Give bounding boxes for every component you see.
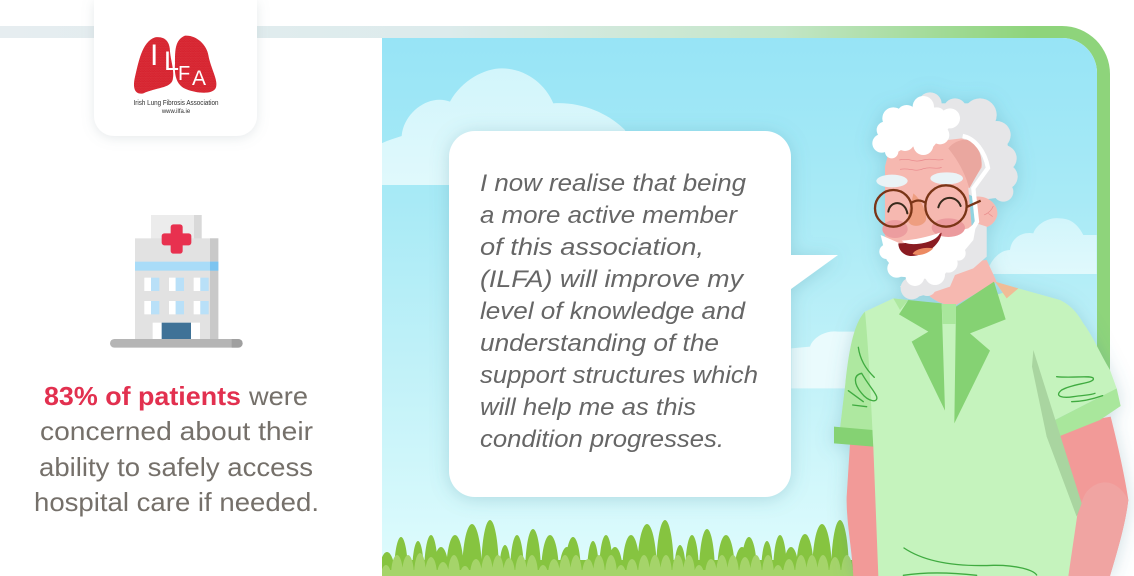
left sleeve (840, 312, 878, 432)
quote text: a more active member (480, 202, 738, 229)
right arm (1057, 417, 1128, 576)
statistic text: concerned about their (40, 416, 313, 446)
bubble shape (449, 131, 838, 497)
man illustration (834, 92, 1128, 576)
shirt (865, 288, 1117, 576)
speech bubble (449, 131, 838, 497)
card background (94, 0, 257, 136)
hair back (918, 92, 1018, 202)
ear detail (984, 206, 993, 217)
panel: sky scene (379, 38, 1097, 576)
placket (942, 304, 956, 324)
icon: hospital (110, 215, 243, 348)
statistic highlight: 83% of patients (44, 381, 241, 411)
hair edge highlight (963, 136, 988, 244)
shirt creases (848, 347, 1103, 575)
nose (908, 193, 926, 226)
top bar and green frame (0, 26, 1110, 372)
grass: dark blades (382, 520, 853, 570)
cheeks (882, 220, 908, 238)
left lapel (899, 300, 945, 411)
beard back (900, 223, 987, 299)
face (885, 138, 982, 253)
logo: association name: Irish Lung Fibrosis Association (134, 100, 219, 107)
logo: ILFA letters (150, 39, 206, 90)
logo: ILFA letters: A (192, 67, 206, 90)
cloud: upper left (382, 68, 642, 185)
grass (379, 520, 857, 576)
right lapel (954, 282, 1006, 423)
quote text (480, 170, 758, 453)
logo: website: www.ilfa.ie (161, 109, 191, 115)
eyebrows (876, 175, 908, 187)
logo: ILFA letters: L (164, 46, 179, 76)
mouth (898, 233, 942, 256)
quote text: condition progresses. (480, 426, 724, 453)
forehead wrinkles (899, 159, 943, 170)
quote text: will help me as this (480, 394, 696, 421)
quote text: understanding of the (480, 330, 719, 357)
quote text: (ILFA) will improve my (480, 266, 745, 293)
quote text: of this association, (480, 234, 704, 261)
neck (920, 260, 997, 305)
eyes (888, 198, 961, 213)
sky background (382, 38, 1097, 576)
right forearm (1068, 482, 1128, 576)
statistic text: were (248, 381, 308, 411)
logo card (94, 0, 257, 136)
logo: lungs (134, 36, 216, 94)
tongue (913, 248, 933, 255)
hospital blue band (135, 262, 218, 271)
cloud: lower middle (791, 331, 857, 388)
door (153, 323, 200, 339)
ground (110, 339, 243, 348)
grass: light blades (381, 553, 857, 576)
glasses (875, 185, 981, 227)
beard front (879, 222, 977, 286)
logo: ILFA letters: I (150, 39, 158, 72)
quote text: support structures which (480, 362, 758, 389)
red cross (162, 224, 191, 254)
quote text: I now realise that being (480, 170, 747, 197)
ear (975, 196, 997, 228)
hospital top block (151, 215, 202, 239)
statistic text: ability to safely access (39, 452, 313, 482)
moustache and teeth (902, 233, 940, 244)
left cuff (834, 427, 873, 447)
windows (144, 278, 209, 314)
left arm (847, 443, 879, 576)
shirt fold shadow (1032, 350, 1082, 517)
right cuff (1055, 388, 1121, 436)
face shade (948, 140, 982, 188)
cloud: right (987, 218, 1097, 274)
hair front (872, 96, 960, 158)
statistic text: hospital care if needed. (34, 487, 319, 517)
man: head (872, 92, 1018, 299)
quote text: level of knowledge and (480, 298, 746, 325)
shoulder patch (995, 282, 1018, 298)
man: body and shirt (834, 260, 1128, 576)
statistic text (34, 381, 319, 517)
hospital main block (135, 238, 218, 339)
logo: ILFA letters: F (178, 63, 190, 85)
collar base (893, 298, 908, 310)
